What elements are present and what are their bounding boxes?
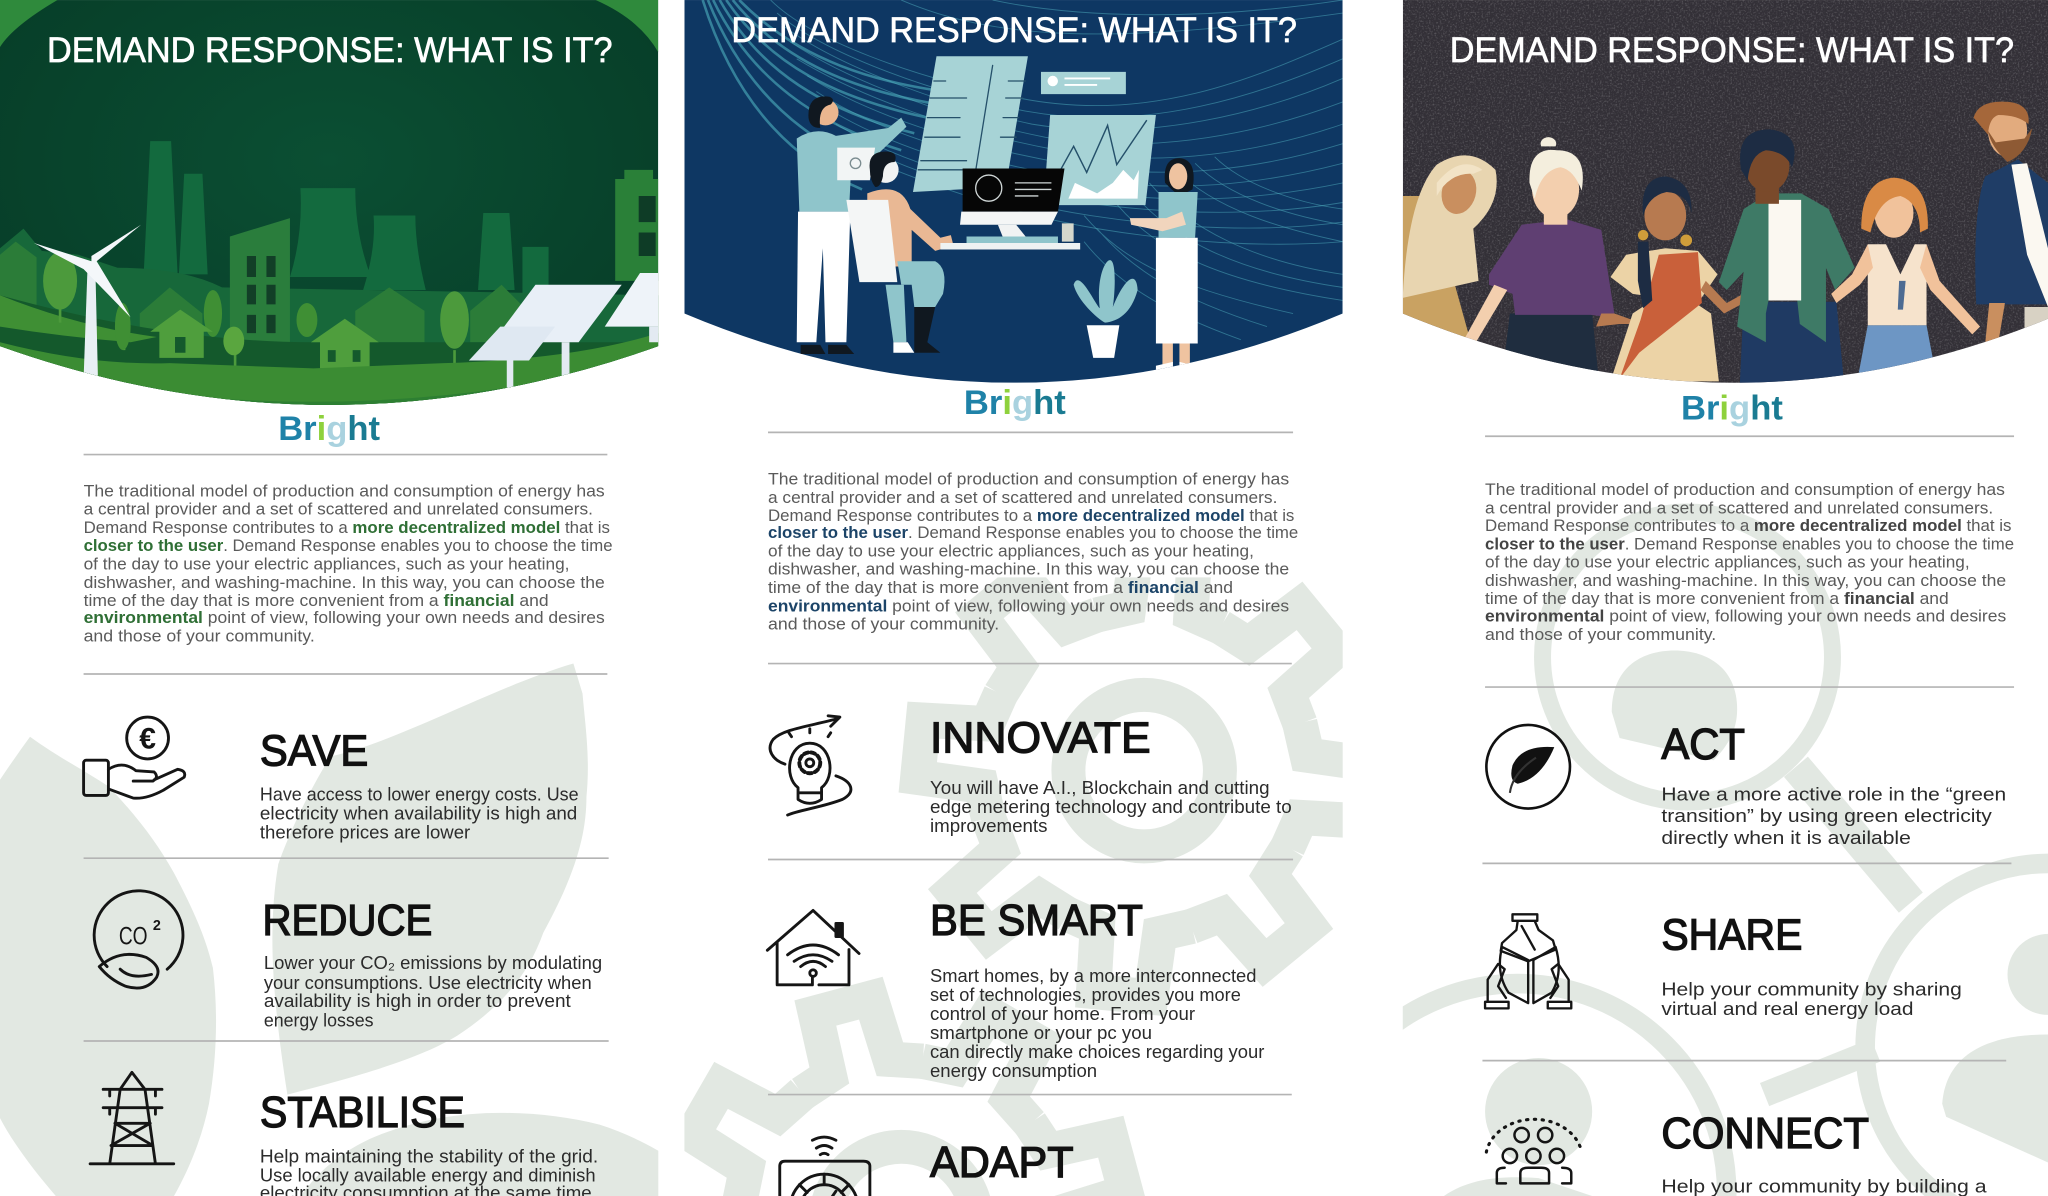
intro paragraph: closer to the user. Demand Response enables you to choose the time — [84, 537, 613, 555]
icon: smart home with wifi — [767, 910, 859, 985]
item: CONNECT: Help your community by building a — [1661, 1176, 1988, 1196]
intro paragraph: and those of your community. — [768, 616, 999, 634]
intro paragraph: of the day to use your electric appliances, such as your heating, — [84, 556, 569, 574]
item: SHARE: Help your community by sharing — [1661, 978, 1962, 999]
item: SAVE: therefore prices are lower — [260, 822, 470, 843]
intro paragraph: dishwasher, and washing-machine. In this way, you can choose the — [84, 574, 605, 592]
icon: connected community — [1486, 1119, 1582, 1183]
intro paragraph: of the day to use your electric appliances, such as your heating, — [1485, 554, 1970, 572]
icon: CO2 bubble with leaf — [94, 891, 183, 988]
intro paragraph: The traditional model of production and consumption of energy has — [768, 471, 1289, 489]
item: REDUCE — [263, 897, 602, 1031]
intro paragraph: a central provider and a set of scattered and unrelated consumers. — [768, 489, 1277, 507]
item: ACT — [1661, 721, 2006, 848]
item: CONNECT: CONNECT — [1661, 1110, 1869, 1158]
header illustration: team working with screens — [684, 0, 1343, 392]
item: INNOVATE: improvements — [930, 815, 1048, 836]
item: SAVE: Have access to lower energy costs. Use — [260, 784, 579, 805]
divider — [1485, 435, 2014, 437]
title: DEMAND RESPONSE: WHAT IS IT? — [1450, 31, 2014, 70]
icon: hand holding euro coin — [84, 717, 185, 798]
intro paragraph: The traditional model of production and consumption of energy has — [84, 482, 605, 500]
item: SAVE — [260, 727, 579, 843]
intro paragraph: environmental point of view, following your own needs and desires — [768, 597, 1289, 615]
item: REDUCE: energy losses — [264, 1010, 374, 1031]
intro paragraph: dishwasher, and washing-machine. In this way, you can choose the — [1485, 572, 2006, 590]
divider — [84, 673, 607, 675]
item: ACT: directly when it is available — [1661, 827, 1911, 848]
item: INNOVATE: You will have A.I., Blockchain and cutting — [930, 777, 1270, 798]
divider — [84, 454, 607, 456]
panel: green energy leaflet — [0, 0, 658, 1196]
intro paragraph: The traditional model of production and consumption of energy has — [1485, 481, 2005, 499]
item: INNOVATE: edge metering technology and contribute to — [930, 796, 1292, 817]
divider — [768, 663, 1292, 665]
intro paragraph: a central provider and a set of scattered and unrelated consumers. — [1485, 499, 1993, 517]
intro paragraph: environmental point of view, following your own needs and desires — [1485, 608, 2006, 626]
title: DEMAND RESPONSE: WHAT IS IT? — [47, 31, 613, 70]
item: BE SMART: Smart homes, by a more interconnected — [930, 965, 1256, 986]
divider — [1485, 686, 2014, 688]
item: SAVE: SAVE — [260, 727, 368, 775]
item: STABILISE: Use locally available energy and diminish — [260, 1164, 596, 1185]
intro paragraph: Demand Response contributes to a more decentralized model that is — [84, 519, 610, 537]
logo: Bright: Bright — [964, 384, 1066, 422]
icon: light bulb with gear and arrow — [770, 716, 851, 815]
item: BE SMART — [930, 897, 1264, 1081]
intro paragraph: and those of your community. — [1485, 626, 1716, 644]
divider — [84, 857, 609, 859]
logo: Bright: Bright — [1681, 389, 1783, 427]
item: BE SMART: BE SMART — [930, 897, 1143, 945]
item: STABILISE: Help maintaining the stability of the grid. — [260, 1145, 598, 1166]
header illustration: green city with wind turbine and solar panels — [0, 0, 658, 405]
intro paragraph: closer to the user. Demand Response enables you to choose the time — [768, 524, 1298, 542]
divider — [1482, 862, 2011, 864]
item: STABILISE: STABILISE — [260, 1089, 465, 1137]
item: REDUCE: Lower your CO₂ emissions by modulating — [264, 952, 602, 973]
icon: electricity pylon — [90, 1072, 174, 1164]
intro paragraph: and those of your community. — [84, 627, 315, 645]
item: SHARE — [1661, 912, 1962, 1019]
divider — [1482, 1060, 2006, 1062]
item: ADAPT: ADAPT — [930, 1139, 1074, 1187]
item: SHARE: SHARE — [1661, 912, 1802, 960]
item: ACT: Have a more active role in the “green — [1661, 784, 2006, 805]
watermark: leaves — [0, 664, 658, 1196]
item: REDUCE: availability is high in order to prevent — [264, 990, 571, 1011]
intro paragraph — [84, 482, 613, 645]
title: DEMAND RESPONSE: WHAT IS IT? — [731, 11, 1297, 50]
item: SAVE: electricity when availability is high and — [260, 803, 577, 824]
item: ACT: ACT — [1661, 721, 1745, 769]
item: REDUCE: REDUCE — [263, 897, 432, 945]
watermark: connected people network — [1402, 504, 2048, 1196]
icon: CO2 bubble with leaf: 2 — [153, 918, 161, 934]
logo: Bright: Bright — [278, 410, 380, 448]
intro paragraph — [1485, 481, 2014, 644]
watermark: gears — [684, 578, 1343, 1196]
divider — [768, 858, 1293, 860]
intro paragraph: closer to the user. Demand Response enables you to choose the time — [1485, 535, 2014, 553]
icon: CO2 bubble with leaf: CO — [119, 923, 148, 950]
item: STABILISE — [260, 1089, 598, 1196]
panel: community leaflet — [1402, 0, 2048, 1196]
divider — [768, 431, 1293, 433]
header illustration: diverse people holding hands — [1403, 0, 2048, 392]
item: BE SMART: energy consumption — [930, 1060, 1097, 1081]
divider — [84, 1040, 609, 1042]
intro paragraph: dishwasher, and washing-machine. In this way, you can choose the — [768, 561, 1289, 579]
item: INNOVATE: INNOVATE — [930, 714, 1151, 762]
intro paragraph: a central provider and a set of scattered and unrelated consumers. — [84, 501, 593, 519]
intro paragraph: time of the day that is more convenient from a financial and — [768, 579, 1233, 597]
item: CONNECT — [1661, 1110, 1988, 1196]
icon: hand holding euro coin: € — [139, 722, 156, 755]
intro paragraph: environmental point of view, following your own needs and desires — [84, 609, 605, 627]
item: BE SMART: can directly make choices regarding your — [930, 1041, 1264, 1062]
item: BE SMART: smartphone or your pc you — [930, 1022, 1152, 1043]
icon: connected thermostat — [780, 1137, 870, 1196]
item: REDUCE: your consumptions. Use electricity when — [264, 972, 592, 993]
intro paragraph: time of the day that is more convenient from a financial and — [1485, 590, 1949, 608]
intro paragraph: time of the day that is more convenient from a financial and — [84, 592, 549, 610]
item: SHARE: virtual and real energy load — [1661, 998, 1913, 1019]
intro paragraph — [768, 471, 1298, 634]
icon: leaf in circle — [1486, 725, 1570, 809]
item: INNOVATE — [930, 714, 1292, 836]
divider — [768, 1094, 1292, 1096]
item: ACT: transition” by using green electricity — [1661, 805, 1993, 826]
item: BE SMART: control of your home. From your — [930, 1003, 1195, 1024]
item: BE SMART: set of technologies, provides you more — [930, 984, 1241, 1005]
intro paragraph: Demand Response contributes to a more decentralized model that is — [1485, 517, 2011, 535]
intro paragraph: Demand Response contributes to a more decentralized model that is — [768, 507, 1294, 525]
intro paragraph: of the day to use your electric appliances, such as your heating, — [768, 542, 1254, 560]
icon: hands sharing — [1485, 914, 1571, 1008]
panel: innovation leaflet — [626, 0, 1390, 1196]
